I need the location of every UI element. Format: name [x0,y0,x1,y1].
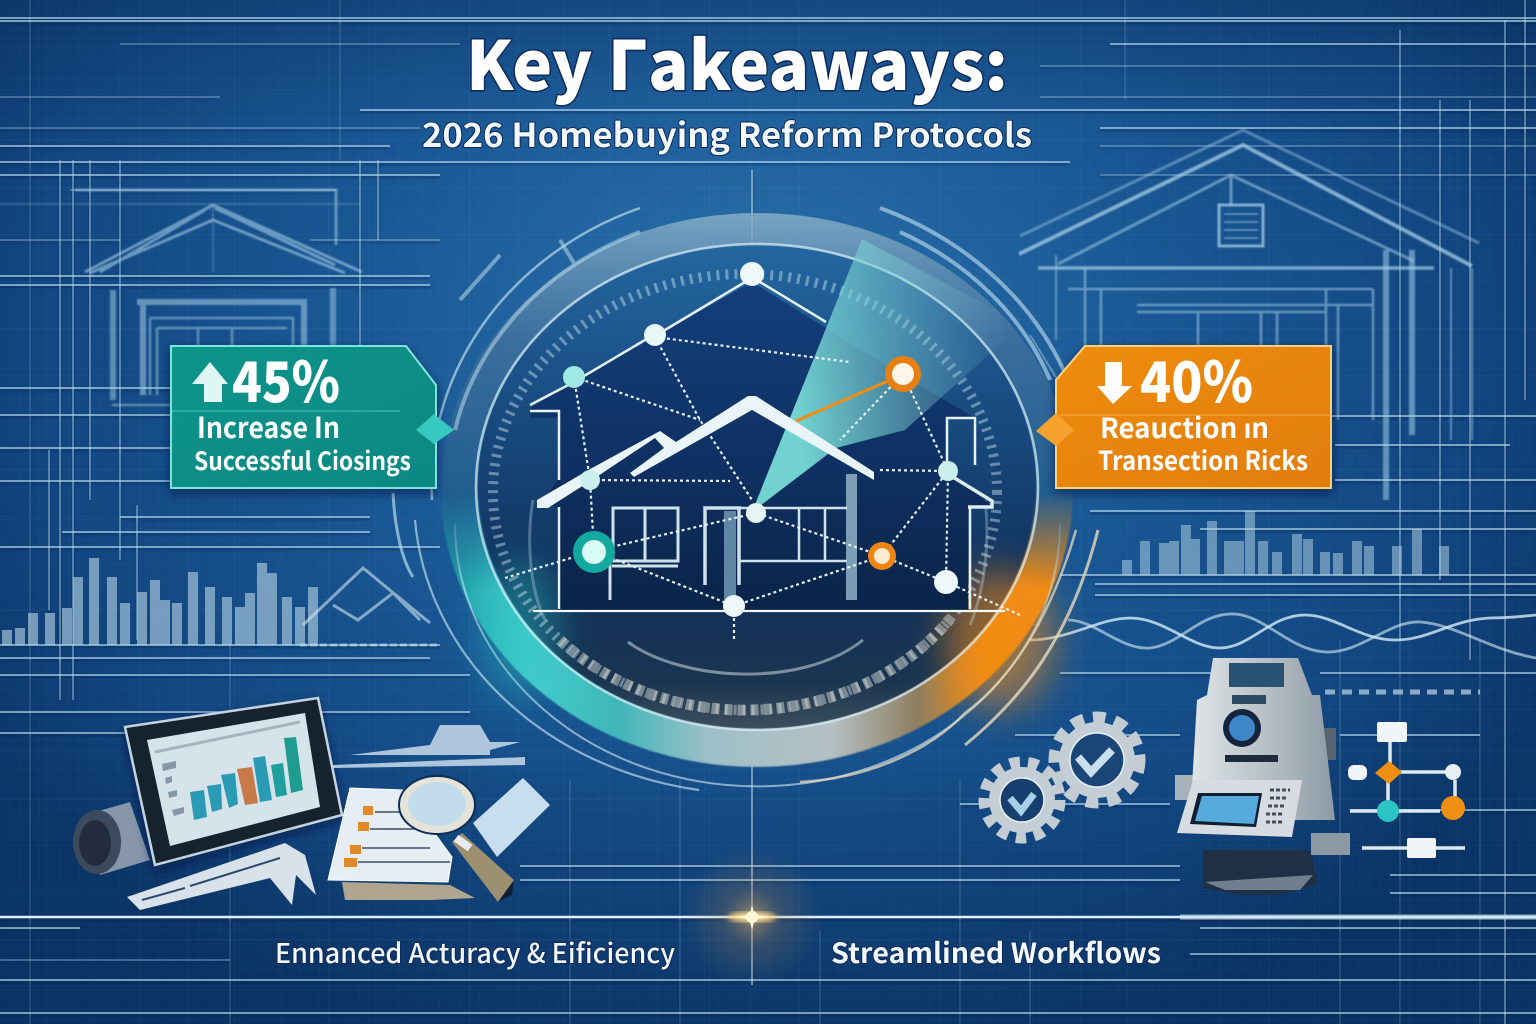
left tools illustration [73,698,550,910]
central radar dial [393,208,1098,790]
right bar chart sketch [1127,511,1444,575]
ring outlines [476,244,1038,730]
icon: down arrow [1097,362,1132,404]
stat: 40%: 40% [1140,338,1253,419]
icon: small gear [985,763,1059,837]
orange glow [945,570,1055,710]
icon: up arrow [192,362,228,402]
label: reduction in: Reauction ın [1100,407,1269,447]
icon: total station [1175,658,1350,895]
label: successful closings: Successful Ciosings [194,442,411,478]
icon: caliper [127,843,316,910]
right ghost house sketch [1019,130,1479,500]
label: transaction risks: Transection Ricks [1098,441,1308,478]
wave lines [1030,614,1536,658]
icon: paper stack [342,882,475,900]
panel: 40% reduction callout [1036,338,1331,488]
stat: 45%: 45% [232,338,340,419]
house silhouette [530,282,993,610]
icon: connector diamond [416,414,454,444]
ground line [533,610,1005,612]
icon: rolled plans [473,778,550,857]
label: increase in: Increase In [197,405,340,447]
icon: magnifying glass [399,776,514,902]
pillar and windows [610,474,857,600]
icon: workflow diagram [1348,722,1465,858]
outer warm arcs [800,530,1098,782]
icon: connector diamond [1036,413,1074,446]
dashed detail line [1325,690,1480,694]
caption: accuracy and efficiency: Ennanced Acturacy & Eificiency [275,932,675,971]
left bar chart sketch [7,558,440,645]
house network illustration [505,239,1020,640]
house outline [530,282,975,609]
dial disc [441,213,1073,767]
network nodes [563,262,958,617]
dial inner disc [478,244,1036,730]
teal glow [480,560,560,700]
icon: tablet with bar chart [125,698,342,865]
left ghost house sketch [0,190,362,405]
subtitle: 2026 Homebuying Reform Protocols [422,109,1032,157]
dotted network links [505,337,1020,640]
panel: 45% increase callout [171,338,454,488]
caption: streamlined workflows: Streamlined Workflows [831,932,1161,972]
title: Key Γakeaways: [466,11,1008,110]
right tools illustration [985,658,1480,895]
main roof [537,396,874,508]
orange scan line [796,381,888,421]
glass ring band: upper [460,232,1054,748]
glass ring band: lower teal to orange [455,490,1060,786]
light flare [682,847,822,987]
icon: straight ruler sketch [333,725,525,768]
icon: checklist document [328,788,452,882]
icon: camera lens [73,802,150,875]
icon: large gear [1056,719,1138,801]
outer rings [393,208,1085,790]
scan wedge [752,239,1005,512]
